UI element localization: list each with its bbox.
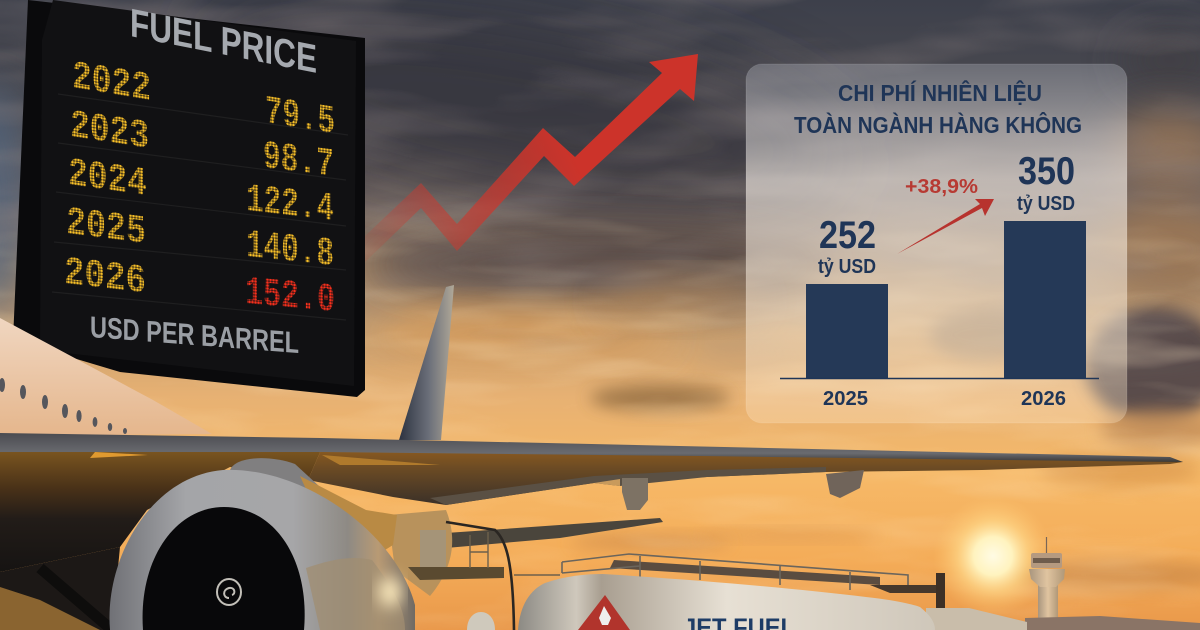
year labels (823, 388, 1066, 410)
bar 2025 (806, 284, 888, 378)
fuel price board (13, 0, 365, 397)
panel heading (794, 79, 1082, 138)
hazard sign (578, 595, 630, 630)
tail fin (399, 285, 454, 440)
fuel price rows: 98.7 (263, 135, 334, 189)
tank body (518, 574, 935, 630)
growth arrow (897, 199, 994, 254)
roof rail (562, 554, 908, 590)
worker hard hat (467, 612, 495, 630)
fuel price rows: 79.5 (265, 89, 335, 146)
control tower (1025, 537, 1200, 630)
fuel price rows: 2026 (64, 251, 146, 305)
fuel price rows: 2024 (68, 152, 147, 208)
year labels: 2026 (1021, 388, 1066, 410)
value 252 (818, 214, 876, 278)
board title: FUEL PRICE (130, 0, 317, 82)
row dividers (52, 94, 348, 320)
trailing vehicle (926, 608, 1027, 630)
fuel price rows: 122.4 (246, 178, 334, 233)
engine inlet (143, 507, 305, 630)
panel heading: TOÀN NGÀNH HÀNG KHÔNG (794, 111, 1082, 138)
fuselage (0, 318, 212, 436)
fuel price rows: 152.0 (245, 271, 335, 324)
value 252: tỷ USD (818, 256, 876, 278)
landing gear (0, 547, 120, 630)
panel heading: CHI PHÍ NHIÊN LIỆU (838, 79, 1042, 106)
fuel price rows: 140.8 (246, 224, 334, 278)
value 350: 350 (1018, 150, 1075, 193)
far side engine and pump rig (388, 510, 560, 630)
fuel tanker (518, 554, 1027, 630)
value 350: tỷ USD (1017, 193, 1075, 215)
rising red arrow (365, 54, 698, 262)
value 350 (1017, 150, 1075, 215)
fuel price rows: 2022 (72, 54, 151, 113)
fuel price rows (64, 54, 335, 324)
spinner (217, 579, 241, 605)
axis (780, 378, 1099, 380)
growth label: +38,9% (905, 176, 978, 198)
cargo on roof (610, 560, 880, 585)
board unit label: USD PER BARREL (90, 311, 299, 360)
engine (109, 458, 415, 630)
flap fairings (622, 478, 648, 510)
bar 2026 (1004, 221, 1086, 378)
cabin windows (0, 378, 127, 434)
panel: aviation fuel cost (746, 64, 1127, 423)
year labels: 2025 (823, 388, 868, 410)
main wing (0, 433, 1183, 572)
far wing (446, 518, 663, 548)
value 252: 252 (819, 214, 876, 257)
fuel price rows: 2025 (66, 201, 146, 256)
fuel price rows: 2023 (70, 104, 149, 161)
sun glow (933, 496, 1053, 616)
